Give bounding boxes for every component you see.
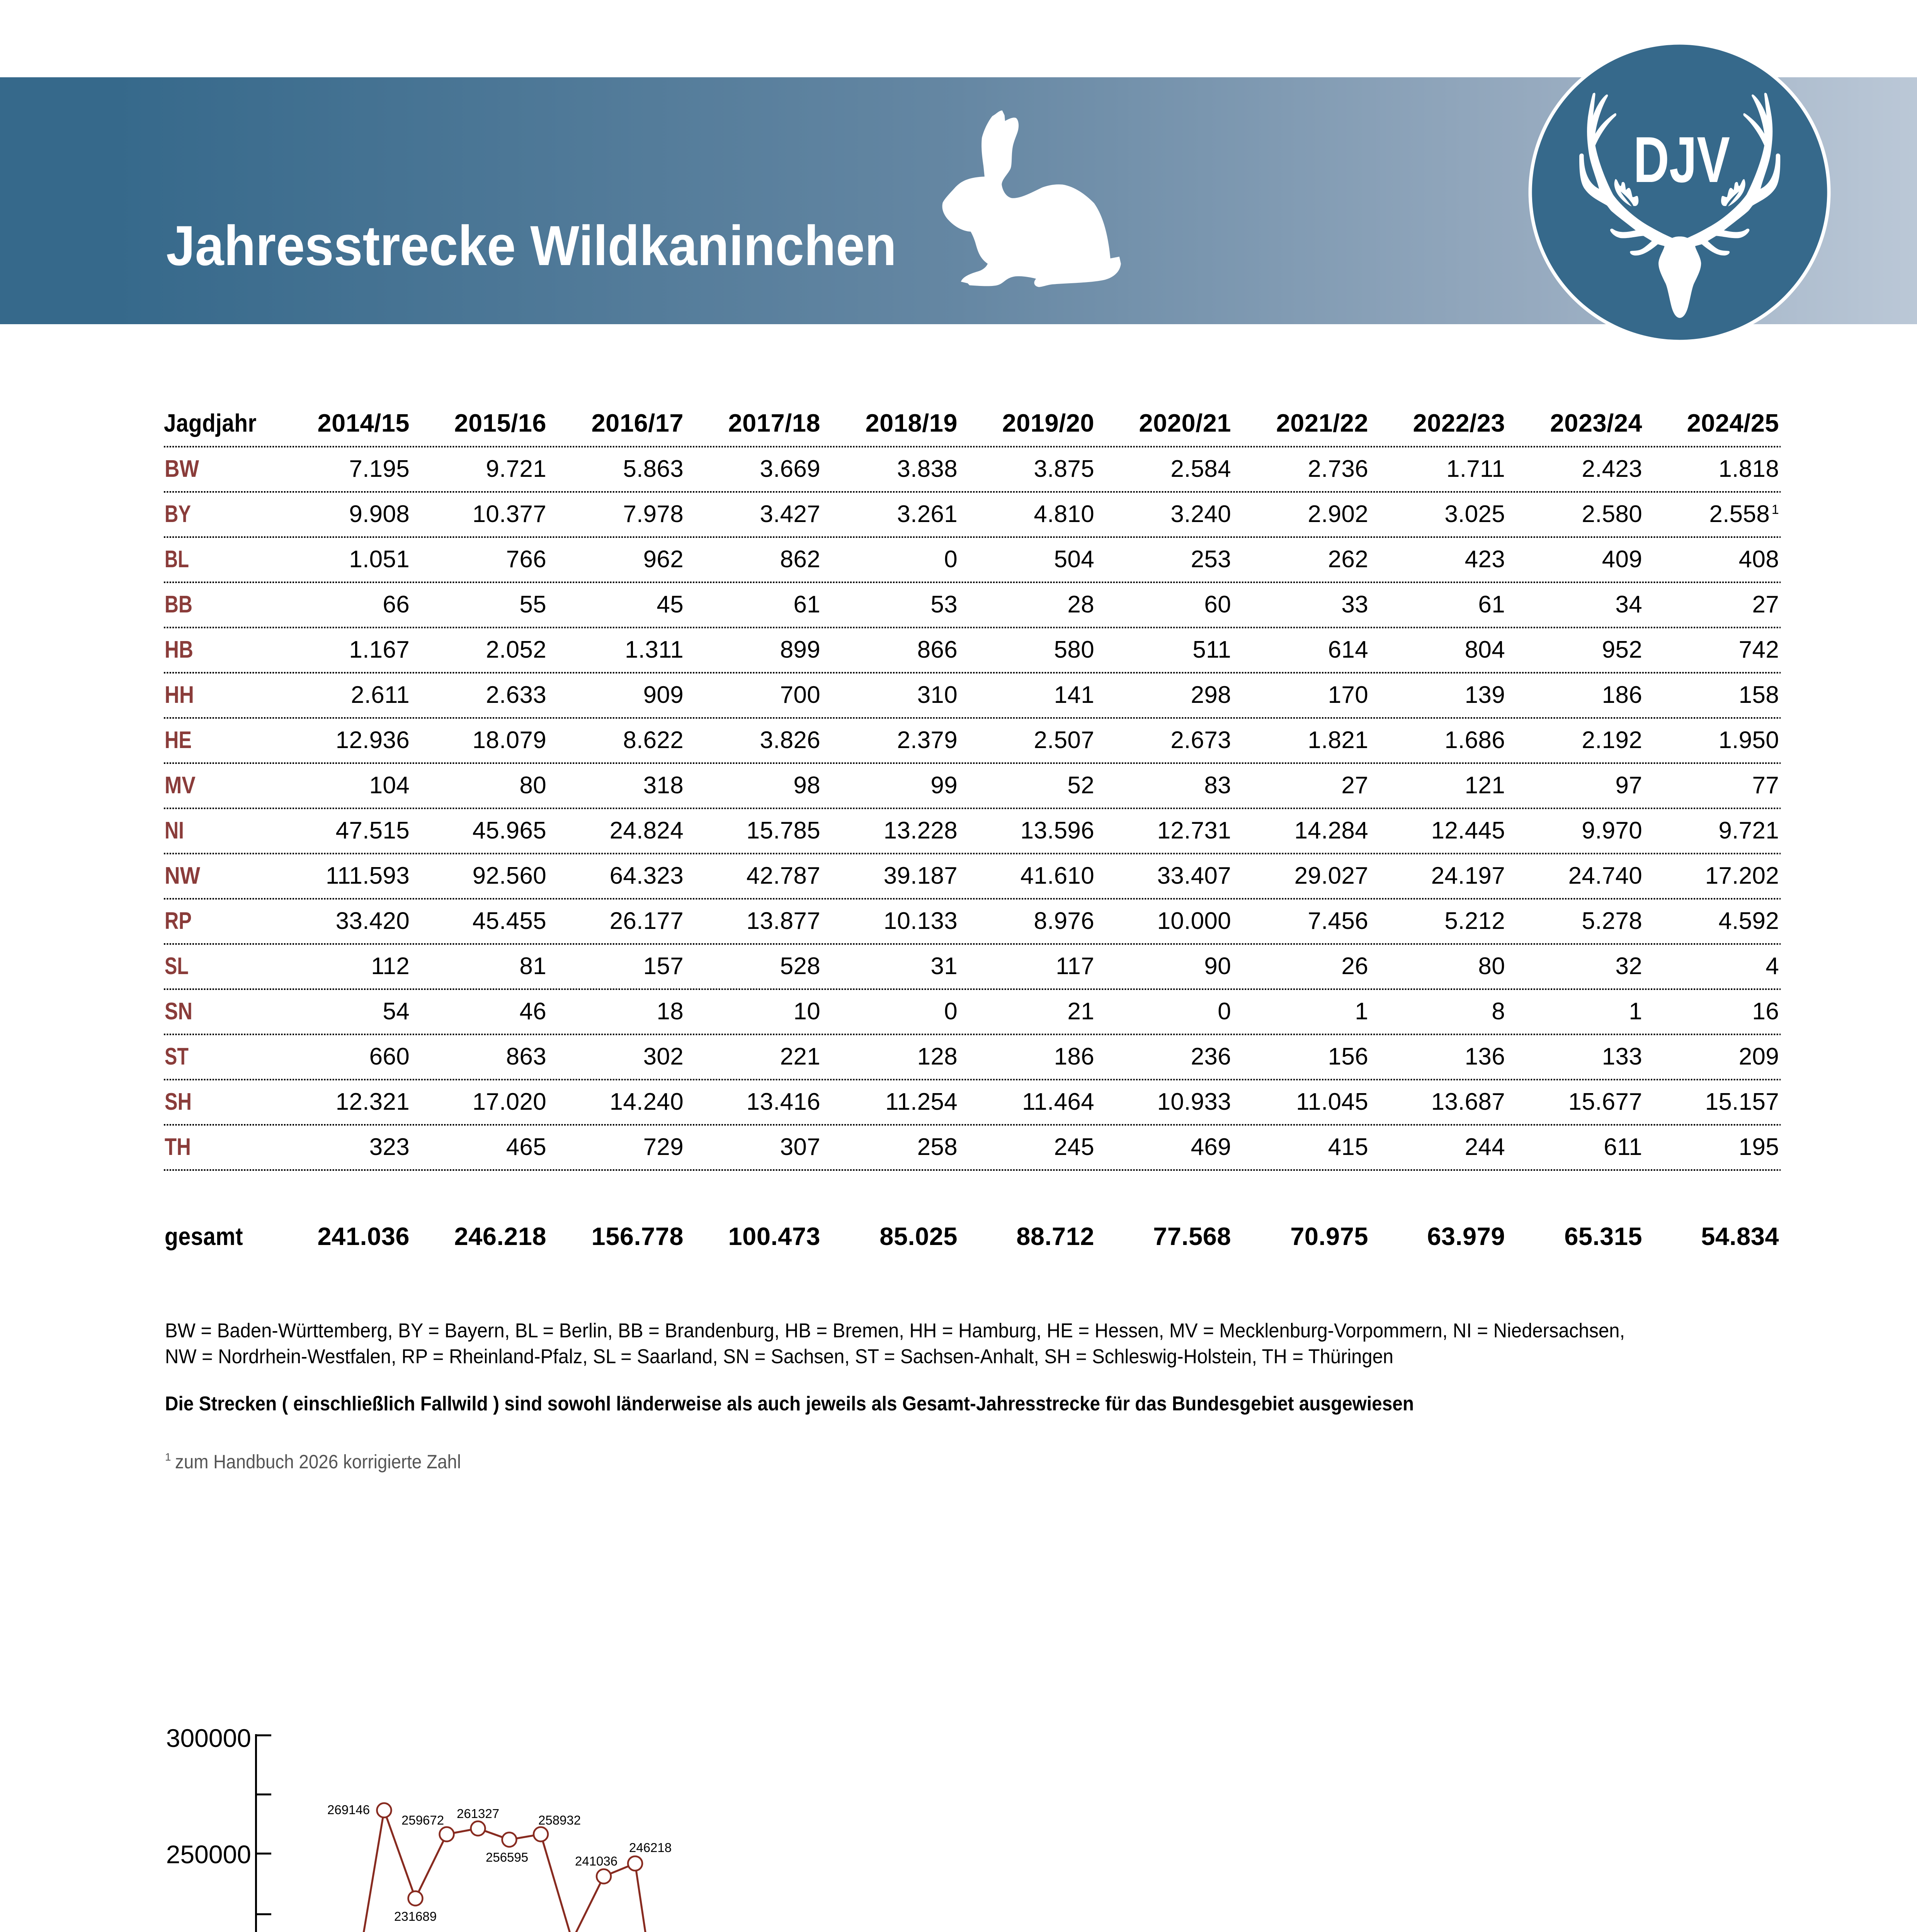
row: BB [165,591,1779,618]
row: HH: 700 [780,682,820,708]
row: NW: 24.740 [1568,862,1642,889]
row: TH: 415 [1328,1134,1368,1160]
row: HH [165,682,1779,708]
row: HB: 866 [917,636,958,663]
row: SH: 10.933 [1157,1088,1231,1115]
row: BL: 408 [1739,546,1779,573]
icon: rabbit silhouette [942,111,1121,287]
row: MV: 99 [930,772,958,799]
row: HB: 742 [1739,636,1779,663]
row: HB: 2.052 [486,636,546,663]
row: RP: RP [165,908,192,934]
table header row [164,409,1779,437]
row: SL: 117 [1056,953,1094,980]
row: BB: 28 [1067,591,1094,618]
row: RP: 10.133 [884,908,958,934]
row: HE: 18.079 [473,727,546,753]
row: ST: 221 [780,1043,820,1070]
row: RP: 5.212 [1444,908,1505,934]
row: HE: 2.507 [1034,727,1094,753]
row: BB: 34 [1615,591,1642,618]
row: SH: 17.020 [473,1088,546,1115]
row: HB [165,636,1779,663]
row: HE: 1.950 [1718,727,1779,753]
row: ST: 186 [1054,1043,1094,1070]
row: BW: 7.195 [349,456,410,482]
row: SN: 0 [944,998,958,1025]
line chart: annual totals [166,1724,960,1932]
data value labels: 241036 [575,1854,617,1868]
row: HE [165,727,1779,753]
row: HE: 1.821 [1308,727,1368,753]
table header row: 2023/24 [1550,409,1642,437]
data markers [283,1803,921,1932]
table header row: 2021/22 [1276,409,1368,437]
row: SH: 13.687 [1431,1088,1505,1115]
row: SL: 90 [1204,953,1231,980]
table header row: 2024/25 [1687,409,1779,437]
row: SN: 54 [383,998,410,1025]
title: Jahresstrecke Wildkaninchen [166,214,896,277]
data value labels: 261327 [457,1806,499,1821]
row: BB: 45 [657,591,684,618]
row: HB: 1.311 [625,636,684,663]
row: BY: 3.261 [897,501,958,527]
row: SH: 11.254 [885,1088,958,1115]
row: BB: 53 [930,591,958,618]
row: HB: 1.167 [349,636,410,663]
row: TH: 195 [1739,1134,1779,1160]
row: BW: 3.875 [1034,456,1094,482]
row: MV: 104 [369,772,410,799]
row: MV: 121 [1465,772,1505,799]
row: RP: 45.455 [473,908,546,934]
row: BW: 3.838 [897,456,958,482]
row: gesamt totals: gesamt [165,1222,243,1250]
row: BL: 1.051 [349,546,410,573]
row: BB: 61 [793,591,820,618]
row: BY: BY [165,501,191,527]
y axis with ticks [255,1734,930,1932]
row: NI: 9.970 [1582,817,1642,844]
row: MV: MV [165,772,196,799]
row: TH: 323 [369,1134,410,1160]
row: SL: 31 [930,953,958,980]
row: SH: 15.157 [1705,1088,1779,1115]
row: BY: 7.978 [623,501,684,527]
row: BL: 766 [506,546,546,573]
row: BL: 504 [1054,546,1094,573]
data value labels: 259672 [401,1813,444,1827]
row: BL: 0 [944,546,958,573]
row: ST: 156 [1328,1043,1368,1070]
row: gesamt totals: 88.712 [1016,1222,1094,1250]
row: HE: 2.192 [1582,727,1642,753]
row: TH: 244 [1465,1134,1505,1160]
row: HE: 1.686 [1444,727,1505,753]
row: SN: 10 [793,998,820,1025]
row: NI: 15.785 [747,817,820,844]
row: BW: 1.818 [1718,456,1779,482]
row: ST: 133 [1602,1043,1642,1070]
row: TH: 258 [917,1134,958,1160]
row: BY: 2.558 [1709,501,1770,527]
row: BY [165,501,1779,527]
row: TH: 729 [643,1134,684,1160]
row: MV: 77 [1752,772,1779,799]
row: ST: 660 [369,1043,410,1070]
row: BW: 9.721 [486,456,546,482]
row: gesamt totals: 85.025 [879,1222,958,1250]
row: HH: 158 [1739,682,1779,708]
row: gesamt totals: 54.834 [1701,1222,1779,1250]
row: NW: 42.787 [747,862,820,889]
row: SL: 112 [371,953,410,980]
row: MV: 52 [1067,772,1094,799]
row: BL: BL [165,546,189,573]
row: NW: 111.593 [326,862,410,889]
row: RP: 7.456 [1308,908,1368,934]
row: SN: 8 [1492,998,1505,1025]
row: MV: 80 [519,772,546,799]
row: HB: 614 [1328,636,1368,663]
row: RP: 33.420 [336,908,410,934]
row: MV: 98 [793,772,820,799]
row: MV: 83 [1204,772,1231,799]
row: ST [165,1043,1779,1070]
table header row: 2015/16 [454,409,546,437]
row: BL: 262 [1328,546,1368,573]
table header row: Jagdjahr [164,409,257,437]
row: BW: 2.584 [1170,456,1231,482]
row: BY: 4.810 [1034,501,1094,527]
data value labels: 256595 [486,1850,528,1864]
row: SH: 14.240 [610,1088,684,1115]
table header row: 2020/21 [1139,409,1231,437]
row: TH: 469 [1191,1134,1231,1160]
row: BB: 33 [1341,591,1368,618]
row: gesamt totals [165,1222,1779,1250]
row: BB: 60 [1204,591,1231,618]
row: NI: 45.965 [473,817,546,844]
row: BW: 2.736 [1308,456,1368,482]
row: HB: 899 [780,636,820,663]
row: SN: 1 [1355,998,1368,1025]
row: NW: 24.197 [1431,862,1505,889]
logo wordmark: DJV [1633,123,1730,196]
row: NI [165,817,1779,844]
row: HE: HE [165,727,192,753]
row: SH: 11.045 [1296,1088,1368,1115]
row: RP: 10.000 [1157,908,1231,934]
row: SL: 80 [1478,953,1505,980]
row: BL: 409 [1602,546,1642,573]
row: BW: 5.863 [623,456,684,482]
row: SH: 12.321 [336,1088,410,1115]
row: HH: 141 [1054,682,1094,708]
row: HH: 139 [1465,682,1505,708]
row: SL: 157 [643,953,684,980]
row: RP: 13.877 [747,908,820,934]
row: HB: HB [165,636,193,663]
row: BB: 66 [383,591,410,618]
row: NW: 29.027 [1294,862,1368,889]
row: SN: 0 [1218,998,1231,1025]
legend: state abbreviations: NW = Nordrhein-Westfalen, RP = Rheinland-Pfalz, SL = Saarland, SN = Sachsen, ST = Sachsen-Anhalt, SH = Schleswig-Holstein, TH = Thüringen [165,1345,1393,1368]
footnote: 1 [165,1451,171,1463]
table header row: 2017/18 [728,409,820,437]
row: BW: 3.669 [760,456,820,482]
row: gesamt totals: 77.568 [1153,1222,1231,1250]
row: BW: 2.423 [1582,456,1642,482]
row: HH: 298 [1191,682,1231,708]
icon: DJV logo badge [1529,41,1831,343]
row: SN: 46 [519,998,546,1025]
legend: state abbreviations: BW = Baden-Württemberg, BY = Bayern, BL = Berlin, BB = Brandenburg, HB = Bremen, HH = Hamburg, HE = Hessen, MV = Mecklenburg-Vorpommern, NI = Niedersachsen, [165,1320,1625,1342]
row: BY: 3.240 [1170,501,1231,527]
data value labels: 258932 [538,1813,581,1827]
table header row: 2019/20 [1002,409,1094,437]
row: BL: 962 [643,546,684,573]
row: BY: 3.025 [1444,501,1505,527]
y axis labels: 300000 [166,1724,251,1752]
row: RP: 4.592 [1718,908,1779,934]
row: SN: 1 [1629,998,1642,1025]
row: gesamt totals: 156.778 [592,1222,684,1250]
row: MV: 97 [1615,772,1642,799]
row: NW: 17.202 [1705,862,1779,889]
row: ST: ST [165,1043,189,1070]
row: NW [165,862,1779,889]
row: HH: 186 [1602,682,1642,708]
row: BY: 10.377 [473,501,546,527]
row: BY: 2.580 [1582,501,1642,527]
row: gesamt totals: 246.218 [454,1222,546,1250]
row: HB: 952 [1602,636,1642,663]
row: TH: 611 [1604,1134,1642,1160]
data value labels: 231689 [394,1909,437,1923]
footnote: zum Handbuch 2026 korrigierte Zahl [175,1451,461,1473]
row: BY: 1 [1772,502,1779,517]
row: SH: 11.464 [1022,1088,1094,1115]
row: SL: 528 [780,953,820,980]
row: RP: 26.177 [610,908,684,934]
row: HE: 3.826 [760,727,820,753]
row: SN: 21 [1067,998,1094,1025]
row: BB: 55 [519,591,546,618]
row: HH: HH [165,682,194,708]
row: BB: 61 [1478,591,1505,618]
row: HH: 170 [1328,682,1368,708]
row: SL: 81 [519,953,546,980]
row: HE: 8.622 [623,727,684,753]
row: NI: 14.284 [1294,817,1368,844]
table header row: 2018/19 [866,409,958,437]
row: MV: 318 [643,772,684,799]
row: NW: 64.323 [610,862,684,889]
row: BL: 862 [780,546,820,573]
row: ST: 209 [1739,1043,1779,1070]
row: SL: 4 [1766,953,1779,980]
row: BW [165,456,1779,482]
row: SH [165,1088,1779,1115]
y axis labels: 250000 [166,1840,251,1869]
row: NI: 12.731 [1157,817,1231,844]
row: TH: 307 [780,1134,820,1160]
row: RP [165,908,1779,934]
row: SH: 13.416 [747,1088,820,1115]
row: ST: 302 [643,1043,684,1070]
row: SH: SH [165,1088,192,1115]
row: BW: 1.711 [1446,456,1505,482]
row: NI: 24.824 [610,817,684,844]
row: SL [165,953,1779,980]
row: gesamt totals: 241.036 [318,1222,410,1250]
row: gesamt totals: 100.473 [728,1222,820,1250]
row: NI: 13.228 [884,817,958,844]
row: HB: 580 [1054,636,1094,663]
header banner [0,41,1917,343]
row: NW: NW [165,862,200,889]
row: SL: SL [165,953,189,980]
row: HB: 511 [1192,636,1231,663]
row: SN: 18 [657,998,684,1025]
row: gesamt totals: 63.979 [1427,1222,1505,1250]
row: HE: 2.379 [897,727,958,753]
row: SL: 26 [1341,953,1368,980]
row: BY: 3.427 [760,501,820,527]
table header row: 2022/23 [1413,409,1505,437]
row: ST: 236 [1191,1043,1231,1070]
row: NI: 12.445 [1431,817,1505,844]
row: TH [165,1134,1779,1160]
row: HH: 2.611 [351,682,410,708]
row: HB: 804 [1465,636,1505,663]
row: gesamt totals: 65.315 [1564,1222,1642,1250]
note: bold explanation: Die Strecken ( einschließlich Fallwild ) sind sowohl länderweise als auch jeweils als Gesamt-Jahresstrecke für das Bundesgebiet ausgewiesen [165,1393,1414,1415]
row: TH: 245 [1054,1134,1094,1160]
row: TH: TH [165,1134,191,1160]
legend: state abbreviations [165,1320,1625,1368]
row: NW: 39.187 [884,862,958,889]
data value labels: 246218 [629,1840,672,1855]
row: SN: 16 [1752,998,1779,1025]
row: BW: BW [165,456,199,482]
row: RP: 8.976 [1034,908,1094,934]
row: RP: 5.278 [1582,908,1642,934]
row: NI: 9.721 [1718,817,1779,844]
data line [290,1810,914,1932]
y axis labels [166,1724,251,1932]
row: HH: 310 [917,682,958,708]
table header row: 2016/17 [592,409,684,437]
row: NW: 92.560 [473,862,546,889]
row: SL: 32 [1615,953,1642,980]
row: BL [165,546,1779,573]
data value labels [282,1803,940,1932]
row: TH: 465 [506,1134,546,1160]
row: BL: 423 [1465,546,1505,573]
row: NI: NI [165,817,184,844]
row: SH: 15.677 [1568,1088,1642,1115]
data table [164,409,1781,1250]
row: BY: 9.908 [349,501,410,527]
row: HH: 909 [643,682,684,708]
row: HE: 12.936 [336,727,410,753]
row: NW: 41.610 [1021,862,1094,889]
table header row: 2014/15 [318,409,410,437]
row: HE: 2.673 [1170,727,1231,753]
row: NI: 13.596 [1021,817,1094,844]
row: HH: 2.633 [486,682,546,708]
data value labels: 269146 [327,1803,370,1817]
row: MV [165,772,1779,799]
row: MV: 27 [1341,772,1368,799]
row: SN: SN [165,998,192,1025]
row: NW: 33.407 [1157,862,1231,889]
row: ST: 863 [506,1043,546,1070]
row: BY: 2.902 [1308,501,1368,527]
row: NI: 47.515 [336,817,410,844]
row: SN [165,998,1779,1025]
row: ST: 136 [1465,1043,1505,1070]
row: gesamt totals: 70.975 [1290,1222,1368,1250]
row: BB: 27 [1752,591,1779,618]
row: BL: 253 [1191,546,1231,573]
row: ST: 128 [917,1043,958,1070]
row: BB: BB [165,591,192,618]
